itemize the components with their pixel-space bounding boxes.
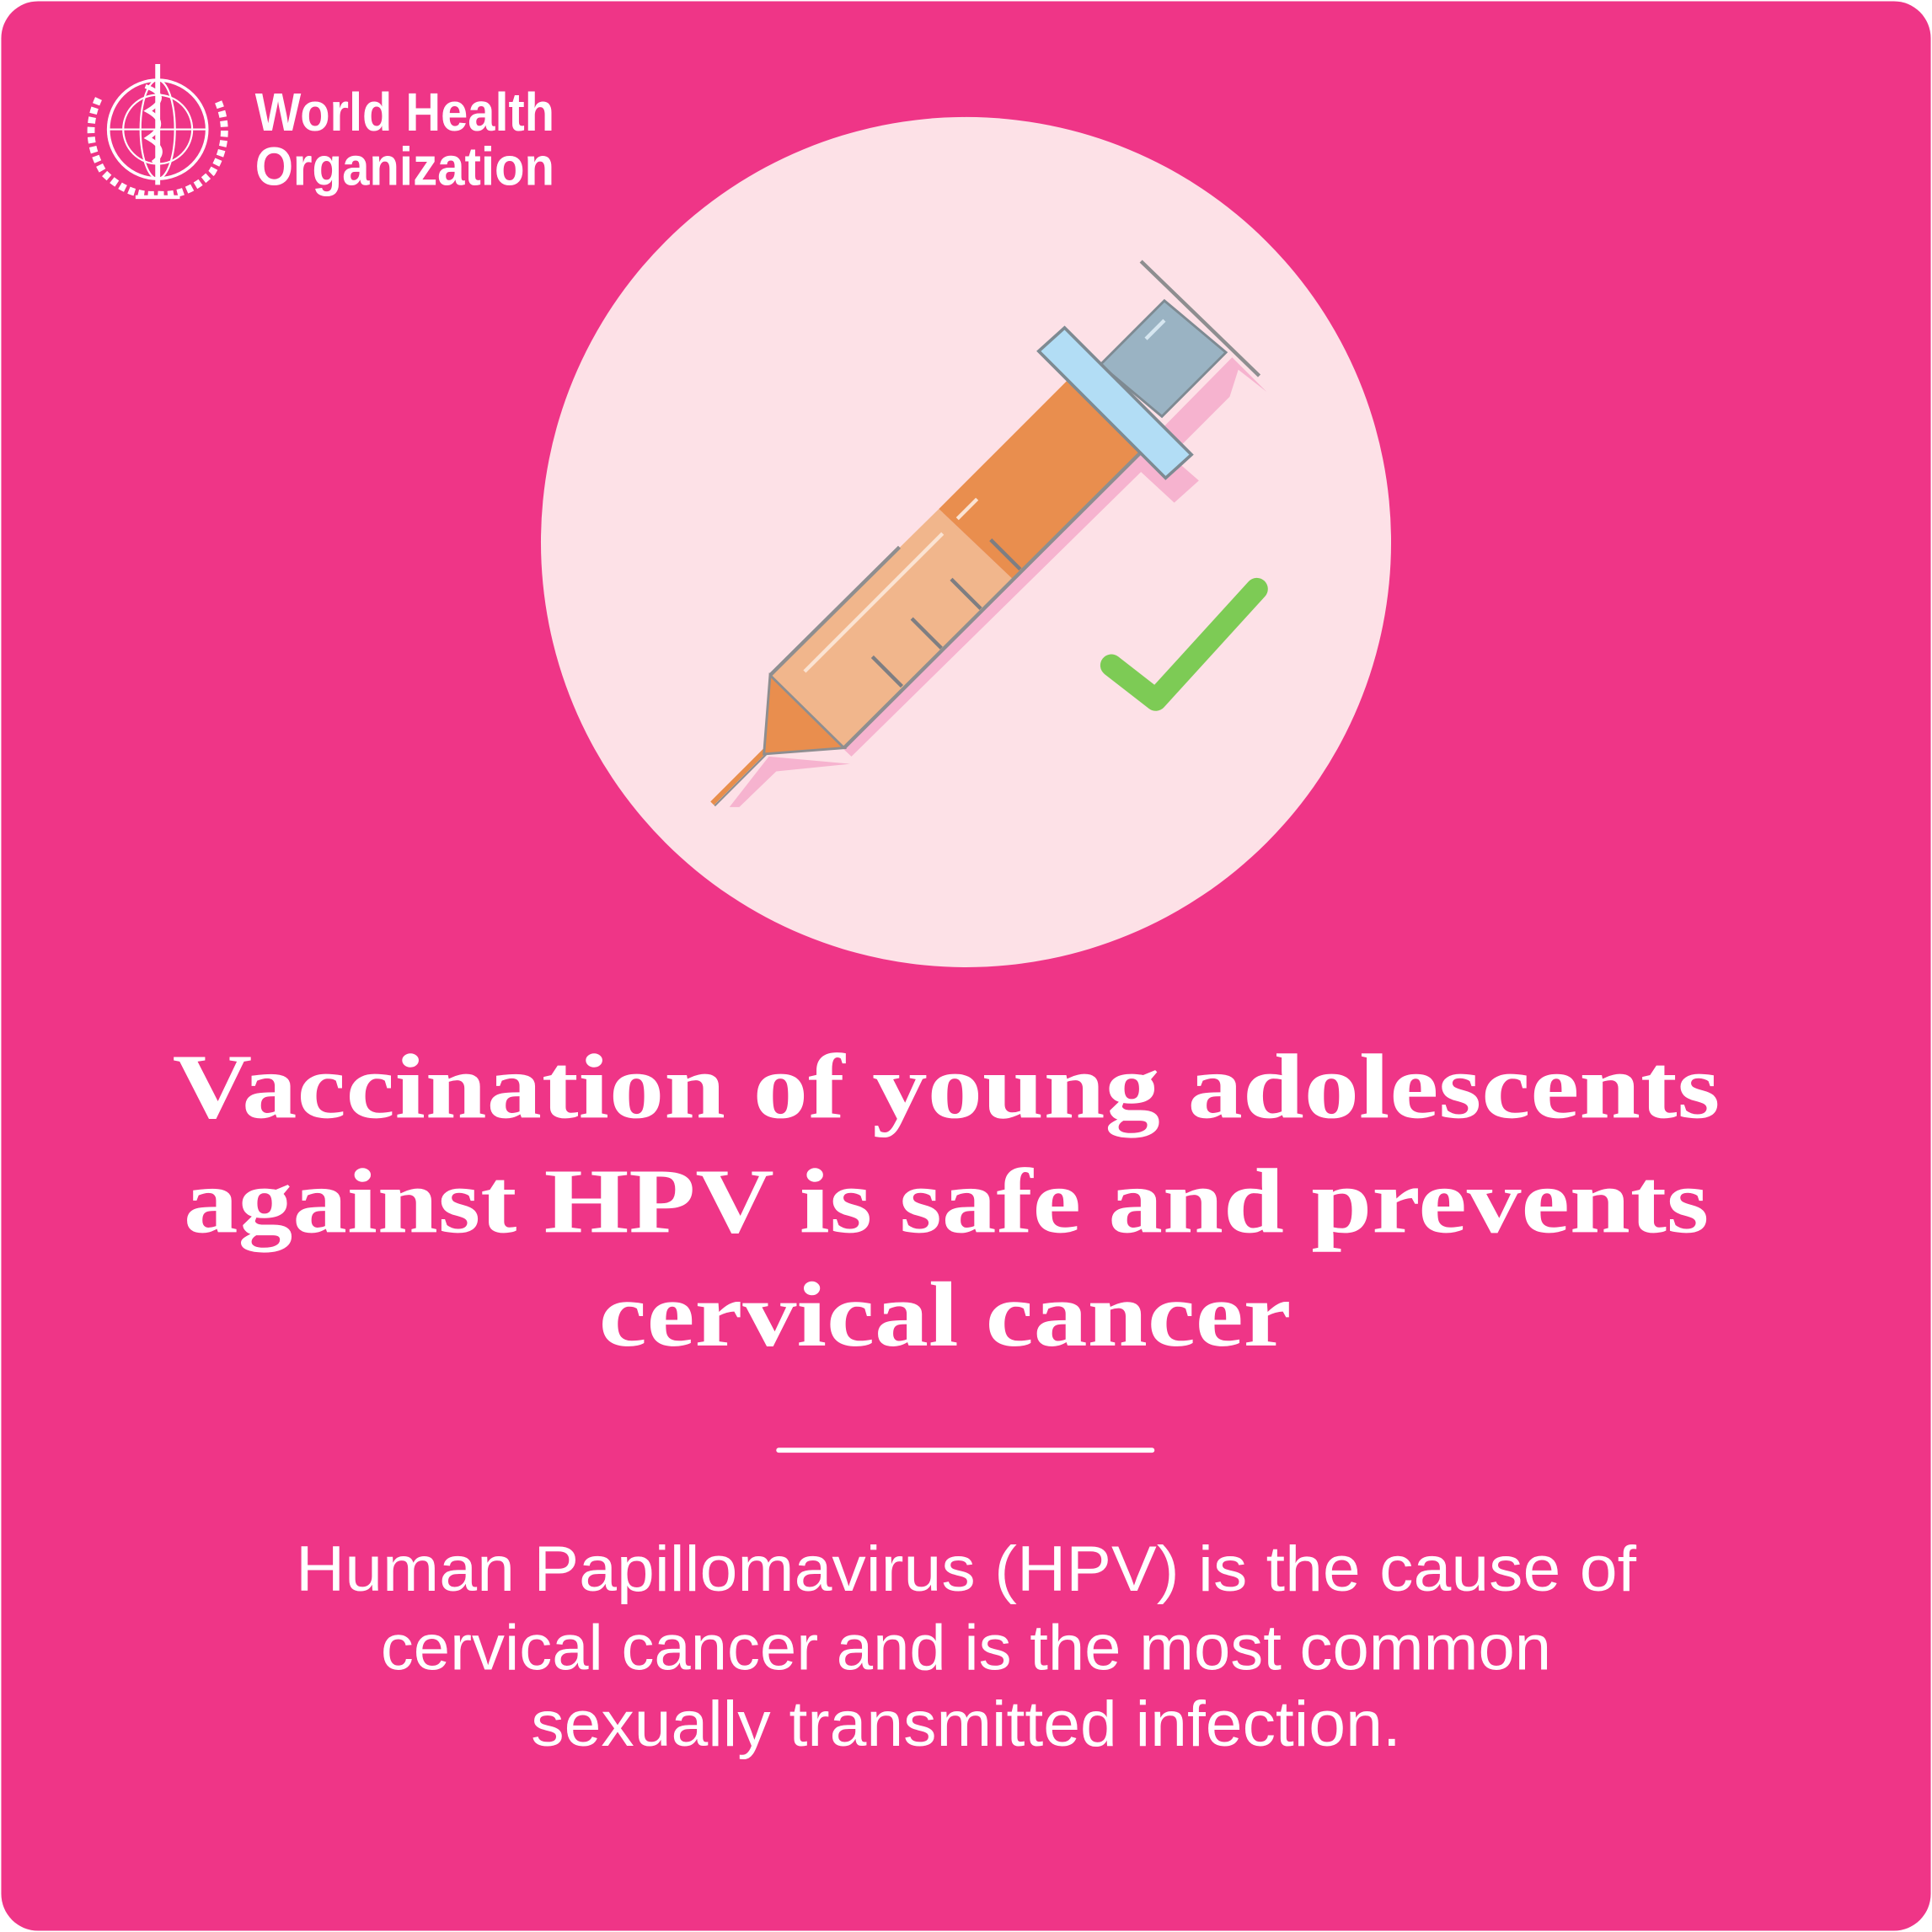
- body text: Human Papillomavirus (HPV) is the cause of: [296, 1533, 1637, 1605]
- barrel outline: [770, 547, 900, 675]
- title: Vaccination of young adolescents: [173, 1035, 1720, 1137]
- title: against HPV is safe and prevents: [184, 1149, 1709, 1252]
- shadow: [776, 357, 1266, 757]
- plunger rod: [1100, 301, 1226, 416]
- title: [173, 1035, 1720, 1366]
- body text: cervical cancer and is the most common: [381, 1613, 1551, 1684]
- cone: [764, 675, 844, 754]
- barrel peach: [770, 509, 1013, 748]
- icon: syringe: [712, 261, 1266, 807]
- tick marks: [872, 540, 1020, 687]
- body text: [296, 1533, 1637, 1760]
- icon: check mark: [1111, 589, 1257, 700]
- illustration circle: [541, 117, 1391, 967]
- body text: sexually transmitted infection.: [531, 1688, 1401, 1760]
- flange: [1039, 328, 1191, 478]
- WHO logo: [91, 64, 554, 197]
- logo text: World Health: [255, 82, 554, 142]
- WHO logo: Organization: [255, 136, 554, 196]
- divider: [779, 1448, 1152, 1452]
- barrel orange: [939, 376, 1146, 579]
- needle: [712, 749, 767, 803]
- icon: WHO emblem: [91, 64, 224, 197]
- title: cervical cancer: [599, 1263, 1292, 1366]
